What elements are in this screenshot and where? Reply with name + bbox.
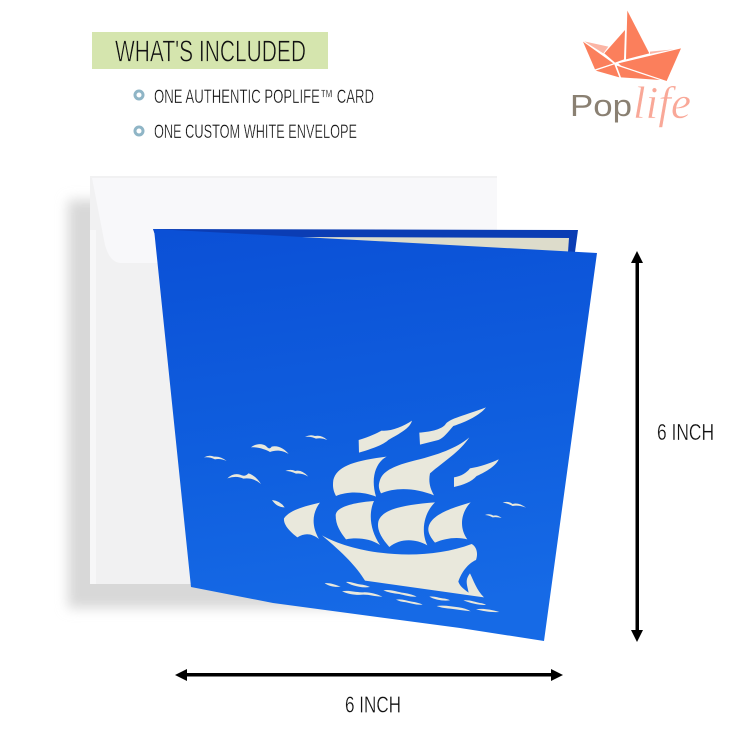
heading: what's included: WHAT'S INCLUDED bbox=[115, 34, 306, 68]
envelope with drop shadow bbox=[68, 176, 497, 608]
seagulls bbox=[204, 435, 327, 484]
text: envelope item: ONE CUSTOM WHITE ENVELOPE bbox=[154, 122, 357, 143]
ship hull bbox=[322, 535, 484, 597]
list: included items bbox=[135, 87, 374, 143]
card back panel bbox=[153, 229, 578, 252]
middle sails bbox=[336, 501, 471, 547]
ship illustration bbox=[322, 407, 526, 612]
large jib bbox=[284, 503, 320, 539]
water waves bbox=[325, 582, 499, 612]
label: height 6 inch: 6 INCH bbox=[657, 419, 714, 445]
wordmark: Pop: Pop bbox=[570, 88, 632, 123]
text: card item: ONE AUTHENTIC POPLIFE™ CARD bbox=[154, 87, 374, 108]
wordmark: life: life bbox=[633, 77, 691, 128]
card inner cream page bbox=[300, 237, 569, 252]
card front panel bbox=[154, 229, 597, 641]
small jib bbox=[272, 500, 285, 507]
bullet icon: card item bbox=[135, 91, 143, 99]
arrow: height dimension bbox=[631, 251, 643, 642]
label: width 6 inch: 6 INCH bbox=[345, 692, 401, 718]
envelope flap bbox=[92, 178, 497, 263]
top sails bbox=[359, 407, 499, 487]
birds and front jib bbox=[204, 435, 327, 539]
upper sails bbox=[333, 437, 469, 497]
envelope side strip bbox=[90, 230, 96, 584]
small birds right bbox=[485, 502, 526, 518]
envelope shadow bbox=[68, 200, 478, 608]
greeting card bbox=[153, 229, 597, 641]
arrow: width dimension bbox=[175, 669, 563, 681]
icon: origami boat bbox=[583, 11, 681, 81]
bullet icon: envelope item bbox=[135, 127, 143, 135]
envelope body bbox=[90, 176, 497, 584]
heading: what's included bbox=[92, 32, 328, 69]
logo: Poplife bbox=[570, 11, 691, 128]
